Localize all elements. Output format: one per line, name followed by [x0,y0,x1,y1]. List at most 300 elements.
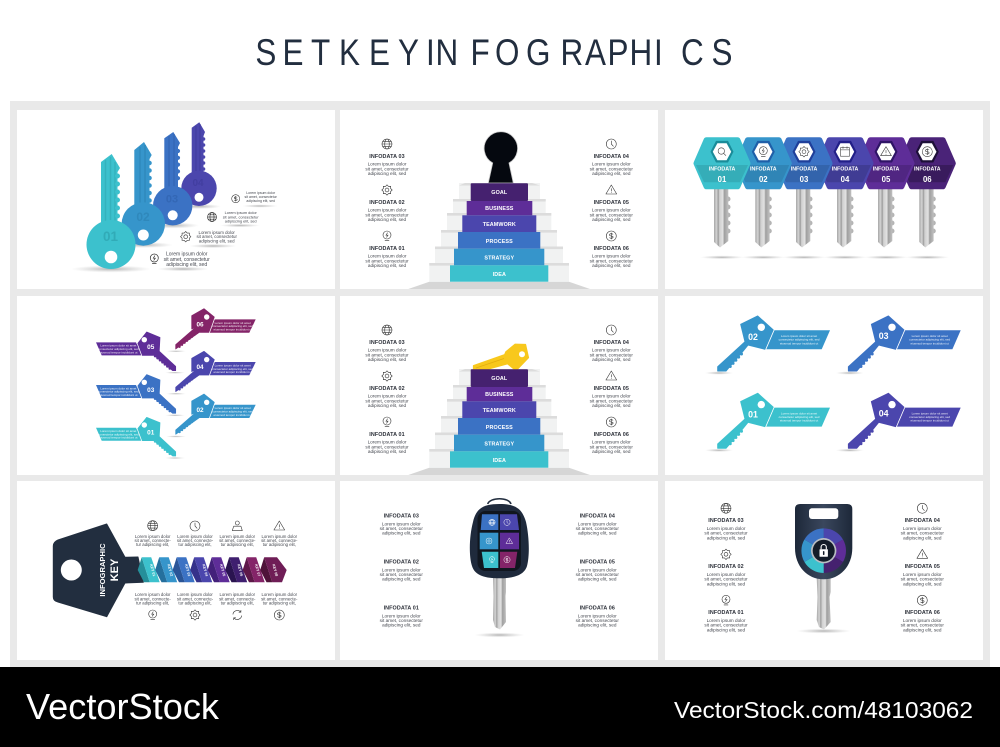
hex key 05: 05 [882,175,891,184]
info 06: sit amet, consectetur [576,618,619,623]
key 06: eiusmod tempor incididunt ut [214,327,252,331]
info 02: adipiscing elit, sed [382,577,421,582]
shadow [474,633,524,637]
info 02: adipiscing elit, sed [707,581,746,586]
big key bow: INFOGRAPHIC [98,543,107,597]
key 04 [836,393,961,452]
spiral key blade [138,557,287,582]
keyhole [484,132,518,183]
step: teamwork [462,215,536,232]
step: process [458,232,540,249]
info 03: sit amet, consectetur [704,531,748,536]
caption 03 [208,210,260,227]
info 01 [365,417,409,454]
six-part dial [801,528,846,573]
info 02: sit amet, consectetur [380,572,423,577]
panel: four diagonal keys [17,110,335,289]
info 02: INFODATA 02 [369,200,405,206]
info 02 [365,371,409,408]
info 03: sit amet, consectetur [365,166,409,171]
step: strategy [454,249,544,265]
top item user: Lorem ipsum dolor [220,534,256,539]
caption 01 [150,252,210,271]
info 04 [576,514,619,536]
panel: car key fob [340,481,658,660]
info 03: Lorem ipsum dolor [368,162,407,167]
top item clock: tur adipiscing elit, [178,542,212,547]
info 03: INFODATA 03 [369,340,405,346]
step: goal: GOAL [491,190,508,196]
info 02: adipiscing elit, sed [368,403,407,408]
info 04: INFODATA 04 [594,340,629,346]
hex key 06 [901,140,953,186]
hex key 06: INFODATA [914,166,941,172]
top item clock: Lorem ipsum dolor [177,534,213,539]
info 05 [590,371,633,408]
step: business [467,387,532,401]
spiral key blade: KEY 08 [271,564,278,577]
key 01: 01 [147,430,155,436]
info 01: adipiscing elit, sed [707,627,746,632]
info 04 [590,139,633,176]
caption 02 [180,230,237,248]
info 05: adipiscing elit, sed [578,577,617,582]
hex key 03 [778,140,830,186]
bottom item dollar: Lorem ipsum dolor [262,592,298,597]
info 06 [590,231,633,268]
key 05: eiusmod tempor incididunt ut [99,350,138,354]
gold key [473,344,529,372]
info 03 [365,325,409,362]
spiral key blade: KEY 07 [254,564,261,577]
info 06: sit amet, consectetur [901,623,944,628]
big key bow: KEY [109,558,121,581]
key 02: 02 [136,210,150,224]
hex key 02 [737,140,789,186]
info 04: sit amet, consectetur [576,526,619,531]
key 03: consectetur adipiscing elit, sed [909,338,950,342]
top item globe [135,521,171,547]
info 01: sit amet, consectetur [704,623,748,628]
key 02: 02 [196,407,204,414]
info 04 [901,503,944,540]
info 02 [380,560,423,582]
key blades [714,189,934,248]
bottom item bulb: sit amet, connecte- [135,596,171,601]
info 06: adipiscing elit, sed [903,627,942,632]
top item warning [261,521,298,547]
shadow [797,629,851,633]
info 02 [704,549,748,586]
bottom item bulb: tur adipiscing elit, [136,601,169,606]
info 02: Lorem ipsum dolor [368,208,407,213]
step: strategy: STRATEGY [484,442,514,448]
info 01: sit amet, consectetur [380,618,423,623]
info 05: sit amet, consectetur [590,212,633,217]
caption 03: Lorem ipsum dolor [225,210,258,215]
key 01: eiusmod tempor incididunt ut [99,436,138,440]
key 03: Lorem ipsum dolor sit amet [100,386,137,390]
step: idea [450,265,548,282]
step: teamwork: TEAMWORK [483,408,516,414]
bottom item dollar: sit amet, connecte- [261,596,298,601]
info 04: Lorem ipsum dolor [592,348,631,353]
bottom item dollar [261,592,298,620]
key 02: 02 [748,332,758,342]
info 02: sit amet, consectetur [365,212,409,217]
top item user [219,521,256,547]
info 05: INFODATA 05 [905,564,940,570]
info 03: sit amet, consectetur [380,526,423,531]
info 05: adipiscing elit, sed [592,217,631,222]
info 06: sit amet, consectetur [590,258,633,263]
key 04: Lorem ipsum dolor sit amet [215,364,251,368]
info 06: INFODATA 06 [594,432,629,438]
info 02: sit amet, consectetur [704,577,748,582]
step: teamwork: TEAMWORK [483,222,516,228]
info 03: INFODATA 03 [384,514,419,520]
spiral key blade: KEY 05 [219,564,226,577]
key 03 [153,132,192,225]
key 03: 03 [147,387,155,394]
key 05: consectetur adipiscing elit, sed [98,347,139,351]
key 01: consectetur adipiscing elit, sed [779,415,820,419]
info 02: sit amet, consectetur [365,398,409,403]
info 03: adipiscing elit, sed [382,531,421,536]
caption 03: adipiscing elit, sed [225,219,257,224]
key 04: eiusmod tempor incididunt ut [214,370,252,374]
step: process: PROCESS [486,239,513,245]
key 01: eiusmod tempor incididunt ut [780,419,818,423]
key 06: 06 [196,321,204,328]
spiral key blade: KEY 03 [184,564,191,577]
hex key 03: INFODATA [791,166,817,172]
info 06: adipiscing elit, sed [592,449,631,454]
icon: padlock [820,544,828,557]
caption 04: adipiscing elit, sed [246,199,275,203]
info 04: Lorem ipsum dolor [903,526,942,531]
info 02: Lorem ipsum dolor [382,567,421,572]
key 01 [705,393,830,452]
fob body [470,499,529,578]
key 01: Lorem ipsum dolor sit amet [781,411,817,415]
info 06: adipiscing elit, sed [592,263,631,268]
info 05: sit amet, consectetur [590,398,633,403]
info 05: INFODATA 05 [580,560,615,566]
key 03: 03 [166,194,178,206]
hex key 04: 04 [841,175,850,184]
step: idea: IDEA [493,272,506,278]
bottom item gear: Lorem ipsum dolor [177,592,213,597]
step: business: BUSINESS [485,392,514,398]
caption 03: sit amet, consectetur [223,214,259,219]
info 04: adipiscing elit, sed [592,171,631,176]
step: goal [471,183,528,201]
key 02: consectetur adipiscing elit, sed [212,410,253,414]
info 02 [365,185,409,222]
key 01 [86,154,136,269]
info 04: adipiscing elit, sed [903,535,942,540]
info 06 [576,606,619,628]
panel: padlock car key [665,481,983,660]
key 01: 01 [103,229,118,244]
key 02: eiusmod tempor incididunt ut [780,341,818,345]
grey board [10,101,990,667]
info 03 [365,139,409,176]
info 02: adipiscing elit, sed [368,217,407,222]
info 01 [380,606,423,628]
bottom item gear [177,592,214,620]
info 01: INFODATA 01 [369,432,405,438]
caption 04 [232,191,278,208]
top item warning: Lorem ipsum dolor [262,534,298,539]
info 03: sit amet, consectetur [365,352,409,357]
blade [817,578,831,630]
step: strategy [454,435,544,451]
key 05: 05 [147,344,155,351]
info 01: Lorem ipsum dolor [707,618,746,623]
info 03: Lorem ipsum dolor [382,521,421,526]
key 04: 04 [196,364,204,371]
key 01: consectetur adipiscing elit, sed [98,432,139,436]
key 04: 04 [192,178,204,189]
info 05: Lorem ipsum dolor [903,572,942,577]
key 04: consectetur adipiscing elit, sed [212,367,253,371]
info 06 [901,595,944,632]
key 01: 01 [748,409,758,419]
panel: four keys with banners [665,296,983,475]
step: business [467,201,532,215]
info 05 [901,549,944,586]
info 01 [365,231,409,268]
key 05: Lorem ipsum dolor sit amet [100,344,137,348]
footer bar [0,667,1000,747]
info 05 [576,560,619,582]
info 04: adipiscing elit, sed [592,357,631,362]
info 01: adipiscing elit, sed [368,449,407,454]
bottom item refresh: Lorem ipsum dolor [220,592,256,597]
info 04: sit amet, consectetur [901,531,944,536]
key 02 [166,394,256,438]
info 06: INFODATA 06 [905,610,940,616]
big key bow [53,524,143,617]
info 05: INFODATA 05 [594,386,629,392]
info 06: INFODATA 06 [594,246,629,252]
caption 04: Lorem ipsum dolor [246,191,276,195]
panel: six label keys [17,296,335,475]
info 04: Lorem ipsum dolor [578,521,617,526]
info 04: sit amet, consectetur [590,352,633,357]
key 02 [122,142,165,246]
key 04: eiusmod tempor incididunt ut [911,419,949,423]
info 06: Lorem ipsum dolor [592,254,631,259]
top item clock [177,521,214,547]
hex key 03: 03 [800,175,809,184]
floor [408,282,590,289]
footer url: VectorStock.com/48103062 [674,697,973,723]
info 01: adipiscing elit, sed [368,263,407,268]
panel: six hexagon keys [665,110,983,289]
info 05: Lorem ipsum dolor [578,567,617,572]
title: SET KEY INFOGRAPHICS [255,33,733,74]
buttons [480,514,519,568]
info 01: Lorem ipsum dolor [368,440,407,445]
key 04 [181,122,217,206]
info 03: adipiscing elit, sed [368,357,407,362]
step: goal [471,369,528,387]
info 02: Lorem ipsum dolor [368,394,407,399]
step: teamwork [462,401,536,418]
key 03: 03 [879,331,889,341]
spiral key blade: KEY 01 [149,564,156,577]
spiral key blade: KEY 02 [166,564,173,577]
hex key 01: INFODATA [709,166,735,172]
info 02: Lorem ipsum dolor [707,572,746,577]
info 06: Lorem ipsum dolor [592,440,631,445]
key head [795,504,852,579]
info 05: adipiscing elit, sed [592,403,631,408]
key 03 [96,375,185,416]
info 04: sit amet, consectetur [590,166,633,171]
top item clock: sit amet, connecte- [177,538,214,543]
bottom item bulb: Lorem ipsum dolor [135,592,171,597]
bottom item refresh [219,592,256,620]
info 03: Lorem ipsum dolor [368,348,407,353]
info 01: INFODATA 01 [369,246,405,252]
info 01: sit amet, consectetur [365,444,409,449]
key 02: Lorem ipsum dolor sit amet [781,334,817,338]
info 05 [590,185,633,222]
key 06 [166,309,256,352]
panel: stairs to keyhole [340,110,658,289]
info 03: Lorem ipsum dolor [707,526,746,531]
info 05: adipiscing elit, sed [903,581,942,586]
key 05 [96,332,185,374]
info 03 [380,514,423,536]
step: business: BUSINESS [485,206,514,212]
info 05: Lorem ipsum dolor [592,394,631,399]
panel: big infographic key [17,481,335,660]
top item globe: sit amet, connecte- [135,538,171,543]
step: strategy: STRATEGY [484,256,514,262]
bottom item refresh: sit amet, connecte- [219,596,256,601]
hex key 05 [860,140,912,186]
info 01: INFODATA 01 [708,610,744,616]
info 03: INFODATA 03 [369,154,405,160]
info 03: adipiscing elit, sed [368,171,407,176]
info 04: INFODATA 04 [580,514,615,520]
key 04: consectetur adipiscing elit, sed [909,415,950,419]
key 02: eiusmod tempor incididunt ut [214,413,252,417]
hex key 01: 01 [718,175,727,184]
bottom item gear: tur adipiscing elit, [178,601,212,606]
info 06: sit amet, consectetur [590,444,633,449]
bottom item dollar: tur adipiscing elit, [263,601,296,606]
bottom item bulb [135,592,171,620]
info 01: Lorem ipsum dolor [368,254,407,259]
info 06: Lorem ipsum dolor [903,618,942,623]
white side stairs [429,183,569,282]
hex key 04: INFODATA [832,166,858,172]
info 02: INFODATA 02 [369,386,405,392]
info 06: Lorem ipsum dolor [578,613,617,618]
key 03: consectetur adipiscing elit, sed [98,390,139,394]
hex key 04 [819,140,871,186]
info 04: adipiscing elit, sed [578,531,617,536]
top item user: tur adipiscing elit, [221,542,254,547]
bottom item refresh: tur adipiscing elit, [221,601,254,606]
info 03 [704,503,748,540]
top item user: sit amet, connecte- [219,538,256,543]
key shadows [700,255,949,259]
hex key 05: INFODATA [873,166,899,172]
key 02: consectetur adipiscing elit, sed [779,338,820,342]
info 06 [590,417,633,454]
info 05: Lorem ipsum dolor [592,208,631,213]
info 01: INFODATA 01 [384,606,419,612]
caption 02: Lorem ipsum dolor [199,230,235,235]
info 03: INFODATA 03 [708,518,744,524]
caption 01: adipiscing elit, sed [166,262,207,268]
step: idea: IDEA [493,458,506,464]
caption 04: sit amet, consectetur [245,195,278,199]
key 06: consectetur adipiscing elit, sed [212,324,253,328]
white side stairs [429,369,569,468]
key 04 [166,351,256,395]
hex key 02: 02 [759,175,768,184]
bottom item gear: sit amet, connecte- [177,596,214,601]
info 01: Lorem ipsum dolor [382,613,421,618]
key 04: Lorem ipsum dolor sit amet [912,411,948,415]
info 01 [704,595,748,632]
top item warning: tur adipiscing elit, [263,542,296,547]
hex key 02: INFODATA [750,166,777,172]
caption 01: sit amet, consectetur [164,257,210,263]
hex key 06: 06 [923,175,932,184]
caption 02: adipiscing elit, sed [199,239,235,244]
info 04: INFODATA 04 [594,154,629,160]
step: process: PROCESS [486,425,513,431]
info 03: adipiscing elit, sed [707,535,746,540]
key 03: eiusmod tempor incididunt ut [911,341,949,345]
key 03: eiusmod tempor incididunt ut [99,393,138,397]
hex key 01 [696,140,748,186]
info 01: sit amet, consectetur [365,258,409,263]
key 01: Lorem ipsum dolor sit amet [100,429,137,433]
key 04: 04 [879,408,889,418]
spiral key blade: KEY 04 [201,564,208,577]
top item warning: sit amet, connecte- [261,538,298,543]
info 05: INFODATA 05 [594,200,629,206]
floor [408,468,590,475]
info 06: INFODATA 06 [580,606,615,612]
info 02: INFODATA 02 [708,564,744,570]
key 01 [96,417,185,459]
key 02 [705,316,830,375]
key 02: Lorem ipsum dolor sit amet [215,406,251,410]
top item globe: tur adipiscing elit, [136,542,169,547]
key 03: Lorem ipsum dolor sit amet [912,334,948,338]
info 06: adipiscing elit, sed [578,623,617,628]
step: process [458,418,540,435]
blade [493,578,506,630]
top item globe: Lorem ipsum dolor [135,534,171,539]
step: goal: GOAL [491,376,508,382]
info 05: sit amet, consectetur [576,572,619,577]
key 03 [836,316,961,375]
caption 01: Lorem ipsum dolor [166,252,208,258]
step: idea [450,451,548,468]
